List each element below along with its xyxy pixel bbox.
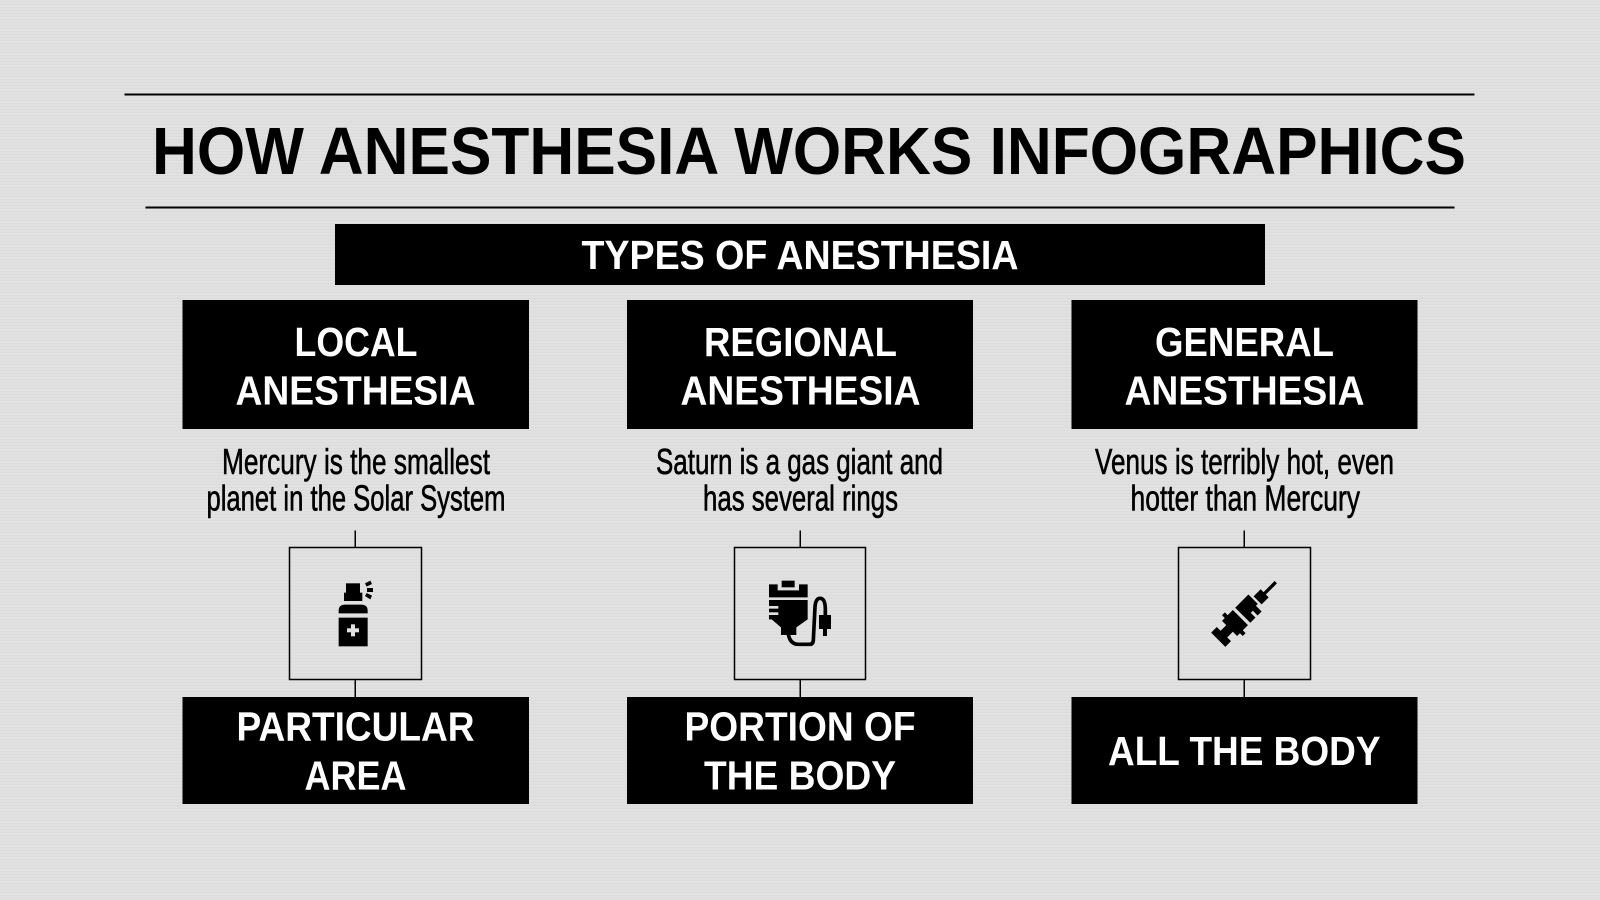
icon: spray bottle in frame	[290, 530, 422, 697]
panel: general anesthesia	[1072, 300, 1418, 804]
header: local anesthesia: LOCAL	[294, 319, 418, 365]
result: portion of the body: PORTION OF	[684, 704, 916, 750]
icon: iv drip bag in frame	[734, 530, 866, 697]
description: regional: has several rings	[703, 478, 898, 518]
header: regional anesthesia	[627, 300, 973, 429]
description: regional: Saturn is a gas giant and	[656, 441, 943, 482]
icon: syringe in frame	[1178, 530, 1310, 697]
description: local: planet in the Solar System	[206, 478, 506, 518]
result: particular area: AREA	[304, 752, 406, 798]
header: regional anesthesia: ANESTHESIA	[680, 368, 920, 414]
description: local	[206, 441, 506, 518]
header: regional anesthesia: REGIONAL	[704, 319, 897, 365]
header: general anesthesia: ANESTHESIA	[1124, 368, 1364, 414]
result: particular area	[182, 697, 529, 804]
title: HOW ANESTHESIA WORKS INFOGRAPHICS	[152, 114, 1466, 189]
result: all the body	[1072, 697, 1418, 804]
header: local anesthesia: ANESTHESIA	[236, 368, 476, 414]
panel: local anesthesia	[182, 300, 529, 804]
description: general: Venus is terribly hot, even	[1095, 441, 1394, 482]
banner: types of anesthesia	[335, 224, 1265, 285]
result: particular area: PARTICULAR	[236, 704, 474, 750]
header: general anesthesia: GENERAL	[1155, 319, 1334, 365]
result: portion of the body	[627, 697, 973, 804]
description: general: hotter than Mercury	[1130, 478, 1360, 518]
header: local anesthesia	[182, 300, 529, 429]
description: general	[1095, 441, 1394, 518]
description: local: Mercury is the smallest	[222, 441, 490, 482]
panel: regional anesthesia	[627, 300, 973, 804]
result: all the body: ALL THE BODY	[1108, 728, 1380, 774]
header: general anesthesia	[1072, 300, 1418, 429]
banner: types of anesthesia: TYPES OF ANESTHESIA	[582, 232, 1018, 278]
description: regional	[656, 441, 943, 518]
result: portion of the body: THE BODY	[704, 752, 896, 798]
